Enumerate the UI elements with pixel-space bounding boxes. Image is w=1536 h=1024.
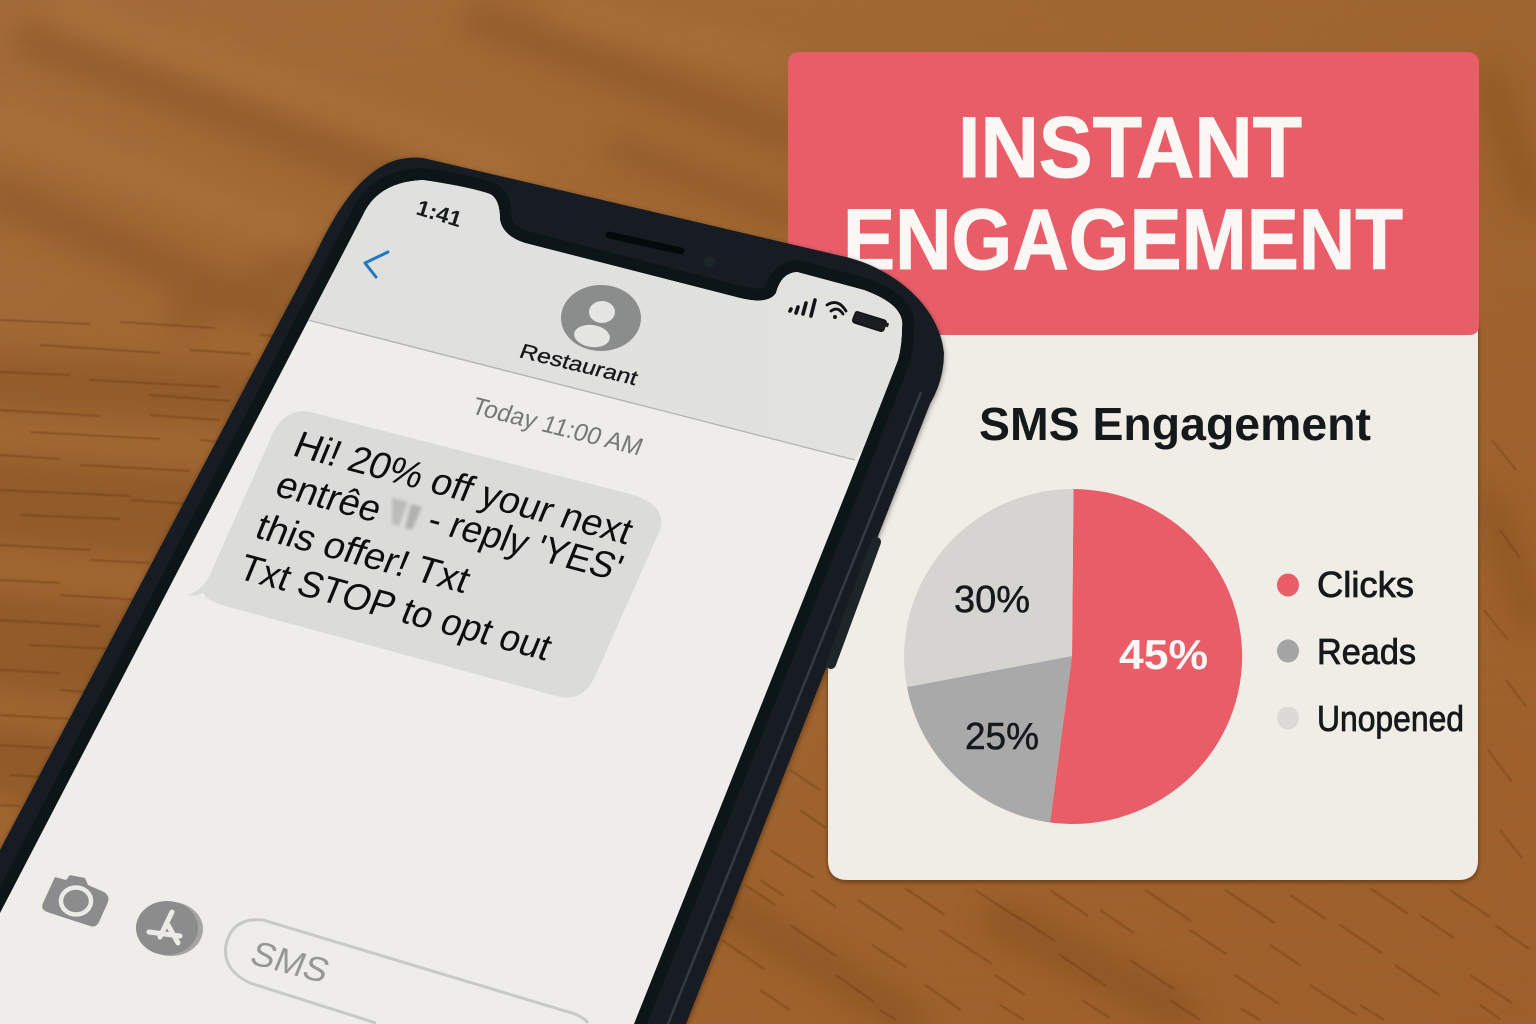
legend: Unopened — [1317, 698, 1464, 739]
front camera — [704, 256, 716, 268]
title: INSTANT — [958, 100, 1302, 196]
earpiece speaker — [609, 235, 681, 251]
icon: battery — [853, 312, 888, 331]
pie chart — [904, 489, 1242, 824]
message text: entrêe — [270, 464, 388, 531]
message text: Txt STOP to opt out — [233, 547, 558, 669]
icon: wifi — [827, 303, 846, 319]
title — [843, 100, 1403, 288]
legend: Reads — [1317, 631, 1416, 672]
phone — [0, 156, 948, 1024]
icon: camera — [42, 875, 108, 926]
message text: Hi! 20% off your next — [288, 424, 639, 553]
SMS input field: SMS — [245, 934, 335, 991]
SMS input field — [226, 920, 588, 1023]
red header banner — [788, 52, 1479, 335]
phone body — [0, 158, 944, 1024]
icon: app store — [136, 901, 203, 956]
title: ENGAGEMENT — [843, 192, 1403, 288]
icon: blurred emoji — [392, 498, 422, 530]
card body — [828, 320, 1478, 880]
legend: Clicks — [1317, 564, 1414, 605]
message text — [233, 424, 639, 669]
timestamp: Today 11:00 AM — [468, 393, 647, 461]
pie chart: 30% — [954, 579, 1030, 621]
fine grain dashes — [0, 320, 1529, 1020]
chart heading: SMS Engagement — [979, 398, 1371, 450]
panel: engagement card — [788, 52, 1479, 880]
pie chart: 45% — [1119, 631, 1208, 678]
legend — [1277, 564, 1464, 739]
icon: signal bars — [790, 300, 815, 316]
status time: 1:41 — [414, 195, 465, 232]
message text: - reply 'YES' — [422, 499, 629, 589]
icon: contact avatar — [561, 285, 641, 351]
contact name: Restaurant — [516, 340, 641, 390]
message header area — [308, 180, 902, 460]
message text: this offer! Txt — [250, 506, 477, 602]
screen — [0, 180, 902, 1024]
side buttons — [831, 542, 876, 664]
message bubble — [187, 411, 661, 698]
pie chart: 25% — [965, 716, 1039, 758]
icon: back chevron — [365, 252, 388, 277]
